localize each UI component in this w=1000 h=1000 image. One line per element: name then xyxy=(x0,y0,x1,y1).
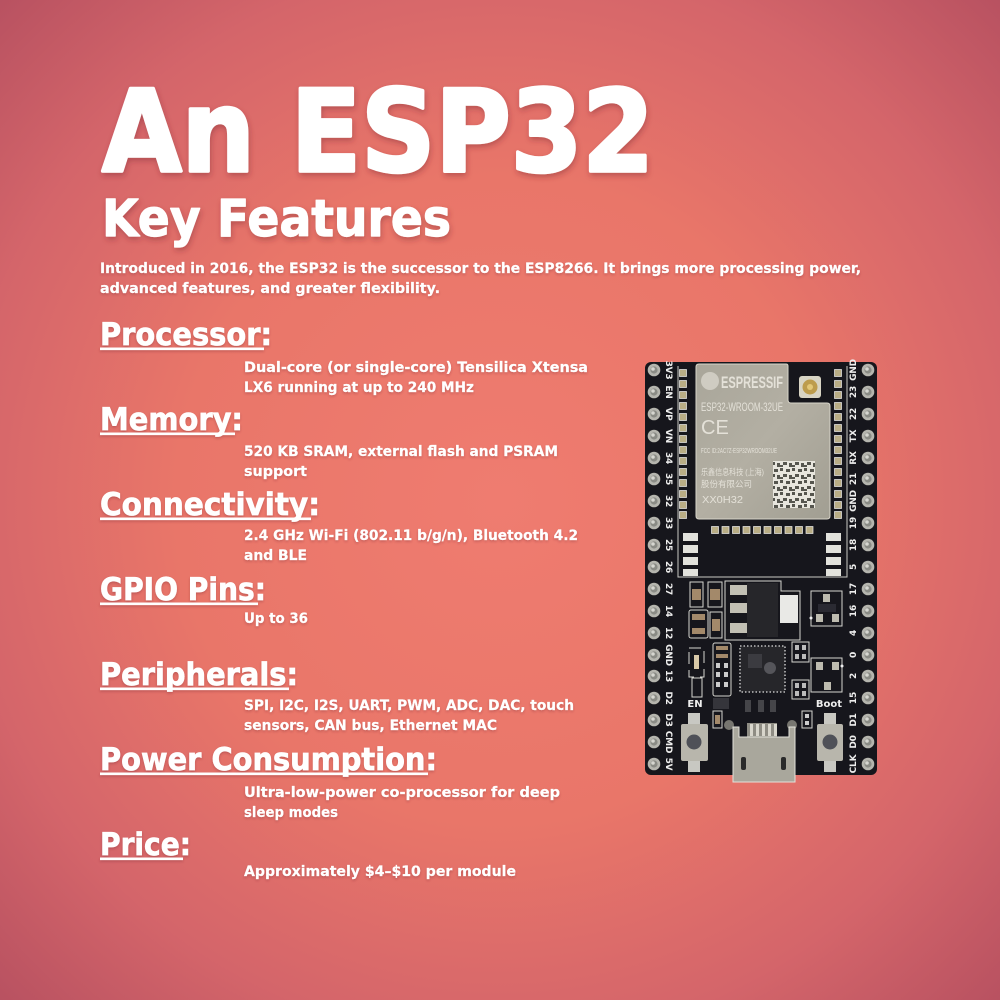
feature: connectivity: 2.4 GHz Wi-Fi (802.11 b/g/n), Bluetooth 4.2 xyxy=(244,528,578,544)
voltage regulator xyxy=(725,581,800,640)
transistors right xyxy=(810,591,844,692)
feature: power consumption: Power Consumption: xyxy=(100,742,437,778)
left pin labels: 13 xyxy=(663,670,673,682)
feature: GPIO pins: Up to 36 xyxy=(244,611,308,627)
left pin labels: VP xyxy=(663,407,673,421)
feature: processor: Dual-core (or single-core) Tensilica Xtensa xyxy=(244,360,588,376)
left pin labels: 26 xyxy=(663,561,673,573)
left pin labels: 12 xyxy=(663,627,673,639)
left pin labels: 14 xyxy=(663,605,673,617)
WROOM module: XX0H32 xyxy=(702,495,743,506)
right pin labels: D0 xyxy=(849,735,859,749)
left pin labels: 27 xyxy=(663,583,673,595)
left pin labels: 33 xyxy=(663,517,673,529)
right pin labels: 21 xyxy=(849,473,859,485)
feature: GPIO pins xyxy=(100,572,308,627)
WROOM module: 乐鑫信息科技 (上海) xyxy=(701,467,764,477)
LED and resistor array xyxy=(689,643,731,697)
EN label: EN xyxy=(687,699,703,710)
right pin labels: D1 xyxy=(849,713,859,727)
subtitle: Key Features xyxy=(102,190,451,249)
ESP32 development board photo xyxy=(645,359,877,782)
right pin labels: 17 xyxy=(849,583,859,595)
feature: memory: 520 KB SRAM, external flash and PSRAM xyxy=(244,444,558,460)
left pin labels: 5V xyxy=(663,758,673,771)
feature: GPIO pins: GPIO Pins: xyxy=(100,572,266,608)
feature: power consumption: Ultra-low-power co-processor for deep xyxy=(244,785,560,801)
left pin labels: CMD xyxy=(663,731,673,753)
small capacitors xyxy=(689,582,722,638)
left pin labels: 35 xyxy=(663,473,673,485)
feature: price: Price: xyxy=(100,827,191,863)
feature: processor: Processor: xyxy=(100,317,272,353)
feature: peripherals xyxy=(100,657,574,734)
feature: peripherals: sensors, CAN bus, Ethernet MAC xyxy=(244,718,497,734)
Boot button xyxy=(817,713,843,772)
feature: processor: LX6 running at up to 240 MHz xyxy=(244,380,474,396)
feature: peripherals: SPI, I2C, I2S, UART, PWM, ADC, DAC, touch xyxy=(244,698,574,714)
feature: power consumption xyxy=(100,742,560,821)
EN button xyxy=(681,713,708,772)
intro text: advanced features, and greater flexibility. xyxy=(100,281,440,297)
Boot label: Boot xyxy=(816,699,842,710)
feature: connectivity: and BLE xyxy=(244,548,307,564)
antenna connector xyxy=(799,376,821,398)
left pin labels xyxy=(663,361,673,771)
feature: price: Approximately $4–$10 per module xyxy=(244,864,516,880)
right pin labels: 16 xyxy=(849,605,859,617)
right pin labels: CLK xyxy=(849,753,859,773)
left pin labels: D3 xyxy=(663,713,673,727)
micro USB connector xyxy=(724,720,797,782)
lower pad area xyxy=(678,366,847,577)
right pin labels xyxy=(849,359,859,773)
feature: power consumption: sleep modes xyxy=(244,805,338,821)
right pin labels: 22 xyxy=(849,408,859,420)
right pin labels: RX xyxy=(849,451,859,465)
left pin labels: 25 xyxy=(663,539,673,551)
right pin labels: 2 xyxy=(849,673,859,679)
right pin labels: GND xyxy=(849,359,859,381)
small chips xyxy=(713,698,812,728)
feature: peripherals: Peripherals: xyxy=(100,657,298,693)
feature: memory: support xyxy=(244,464,307,480)
WROOM module: ESP32-WROOM-32UE xyxy=(701,402,783,414)
right pin labels: 5 xyxy=(849,564,859,570)
left pin labels: D2 xyxy=(663,691,673,705)
WROOM module: FCC ID:2AC7Z-ESP32WROOM32UE xyxy=(701,448,777,455)
left pin labels: 32 xyxy=(663,495,673,507)
feature: memory xyxy=(100,402,558,480)
title: An ESP32 xyxy=(102,66,654,198)
left pin labels: VN xyxy=(663,429,673,443)
WROOM module: ESPRESSIF xyxy=(721,373,783,392)
right pin labels: 19 xyxy=(849,517,859,529)
feature: processor xyxy=(100,317,588,396)
left pin labels: 3V3 xyxy=(663,361,673,379)
feature: memory: Memory: xyxy=(100,402,243,438)
WROOM module xyxy=(696,364,830,519)
feature: price xyxy=(100,827,516,880)
intro text xyxy=(100,261,861,297)
right pin labels: TX xyxy=(849,429,859,442)
right pin labels: GND xyxy=(849,490,859,512)
feature: connectivity: Connectivity: xyxy=(100,487,320,523)
left pin labels: EN xyxy=(663,385,673,399)
small pad blocks xyxy=(792,642,809,699)
USB bridge chip xyxy=(740,646,785,692)
right pin labels: 18 xyxy=(849,539,859,551)
right pin labels: 23 xyxy=(849,386,859,398)
right pin labels: 0 xyxy=(849,652,859,658)
right pin labels: 4 xyxy=(849,630,859,636)
board pin holes xyxy=(648,364,874,770)
left pin labels: GND xyxy=(663,644,673,666)
WROOM module: 股份有限公司 xyxy=(701,479,752,489)
intro text: Introduced in 2016, the ESP32 is the successor to the ESP8266. It brings more processing power, xyxy=(100,261,861,277)
WROOM module: CE xyxy=(701,417,729,439)
right pin labels: 15 xyxy=(849,692,859,704)
feature: connectivity xyxy=(100,487,578,564)
module solder pads xyxy=(680,370,842,534)
left pin labels: 34 xyxy=(663,452,673,464)
